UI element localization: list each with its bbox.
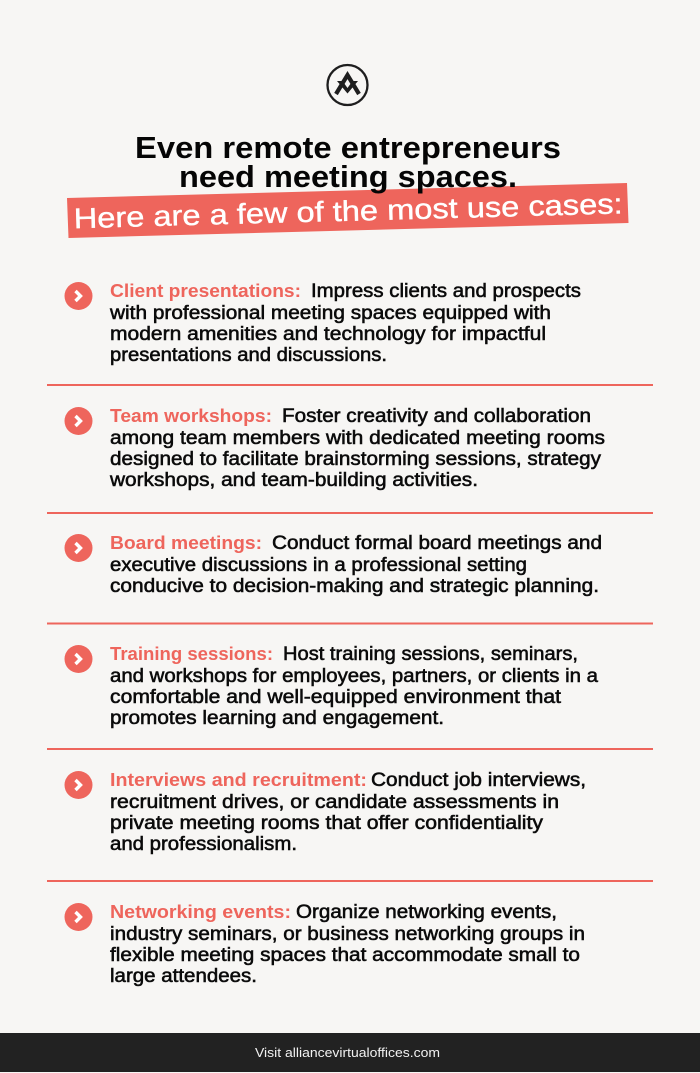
text: interviews and recruitment [110, 769, 586, 855]
text: training sessions [110, 643, 598, 729]
text: client presentations: presentations and discussions. [110, 345, 387, 366]
text: team workshops: among team members with dedicated meeting rooms [110, 428, 605, 449]
item: board meetings [64, 532, 602, 597]
text: team workshops [109, 405, 605, 491]
title: need meeting spaces. [179, 160, 517, 194]
text: networking events: Organize networking events, [296, 902, 557, 923]
text: team workshops: Foster creativity and collaboration [282, 406, 591, 427]
item: training sessions [64, 643, 598, 729]
text: board meetings: conducive to decision-making and strategic planning. [110, 576, 599, 597]
text: interviews and recruitment: Conduct job interviews, [371, 770, 586, 791]
text: board meetings: executive discussions in a professional setting [110, 555, 527, 576]
icon: company logo [328, 65, 368, 105]
text: client presentations: Client presentations: [110, 280, 301, 301]
text: client presentations: with professional meeting spaces equipped with [109, 303, 551, 324]
text: client presentations: Impress clients and prospects [311, 281, 581, 302]
text: team workshops: designed to facilitate brainstorming sessions, strategy [110, 449, 602, 470]
icon: chevron bullet [64, 534, 92, 562]
icon: chevron bullet [64, 903, 92, 931]
text: networking events: flexible meeting spaces that accommodate small to [110, 945, 580, 966]
icon: chevron bullet [64, 282, 92, 310]
text: training sessions: Host training sessions, seminars, [283, 644, 578, 665]
text: training sessions: Training sessions: [110, 643, 273, 664]
footer bar [0, 1033, 700, 1072]
title [135, 131, 561, 194]
text: client presentations [109, 280, 581, 366]
icon: chevron bullet [64, 407, 92, 435]
text: networking events: industry seminars, or business networking groups in [110, 924, 585, 945]
text: networking events: Networking events: [110, 901, 291, 922]
icon: chevron bullet [64, 771, 92, 799]
text: team workshops: workshops, and team-building activities. [109, 470, 478, 491]
item: team workshops [64, 405, 605, 491]
banner: subtitle [67, 183, 628, 238]
text: board meetings [110, 532, 602, 597]
title: Even remote entrepreneurs [135, 131, 561, 165]
text: training sessions: comfortable and well-equipped environment that [110, 687, 562, 708]
item: interviews and recruitment [64, 769, 586, 855]
text: interviews and recruitment: Interviews and recruitment: [110, 769, 367, 790]
item: networking events [64, 901, 585, 987]
text: interviews and recruitment: private meeting rooms that offer confidentiality [110, 813, 544, 834]
text: board meetings: Board meetings: [110, 532, 262, 553]
text: interviews and recruitment: and professionalism. [110, 834, 297, 855]
item: client presentations [64, 280, 581, 366]
icon: chevron bullet [64, 645, 92, 673]
text: team workshops: Team workshops: [110, 405, 272, 426]
text: training sessions: promotes learning and engagement. [110, 708, 444, 729]
footer bar: Visit alliancevirtualoffices.com [255, 1045, 440, 1060]
text: board meetings: Conduct formal board meetings and [272, 533, 602, 554]
text: training sessions: and workshops for employees, partners, or clients in a [110, 666, 598, 687]
text: client presentations: modern amenities and technology for impactful [110, 324, 546, 345]
banner: subtitle: Here are a few of the most use cases: [73, 188, 623, 235]
text: networking events [110, 901, 585, 987]
text: networking events: large attendees. [110, 966, 257, 987]
text: interviews and recruitment: recruitment drives, or candidate assessments in [110, 792, 559, 813]
